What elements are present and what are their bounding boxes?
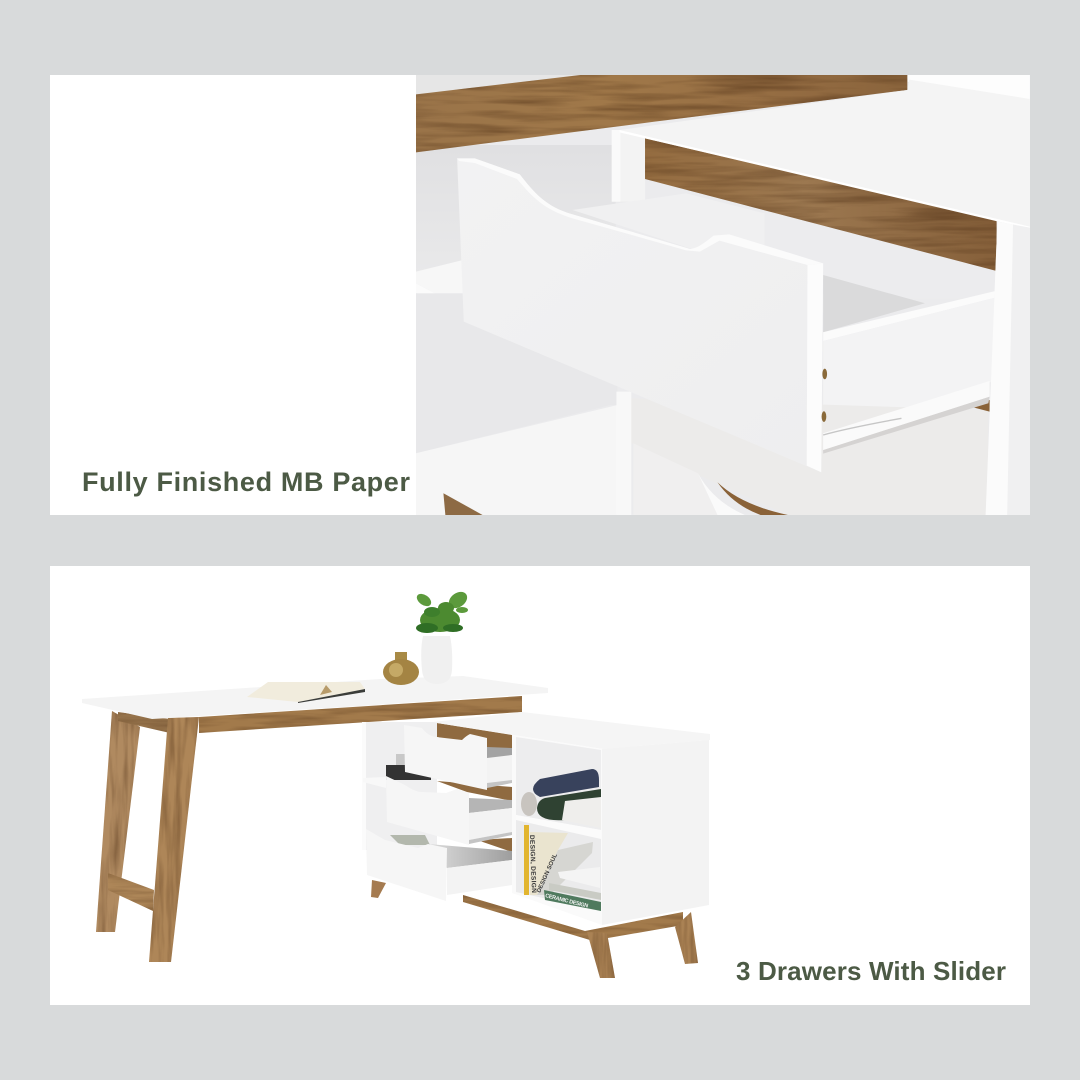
cabinet side panel (602, 740, 709, 925)
drawer screws (822, 369, 827, 422)
white planter (421, 636, 452, 684)
photo: open drawer close-up (416, 75, 1030, 515)
panel: three drawers with slider (50, 566, 1030, 1005)
shelf books (524, 825, 601, 911)
panel: fully finished MB paper (50, 75, 1030, 515)
cabinet top (433, 712, 710, 749)
plant leaves (415, 589, 470, 633)
desk apron (199, 696, 522, 733)
bottom drawer (366, 829, 512, 901)
open book (247, 682, 365, 703)
panel background (50, 566, 1030, 1005)
desk top (82, 676, 548, 719)
desk inner apron (118, 712, 170, 733)
shelf books: DESIGN, DESIGN (528, 835, 537, 893)
wood behind drawers (437, 723, 512, 852)
desk back leg (96, 711, 140, 932)
caption: Fully Finished MB Paper: Fully Finished MB Paper (82, 467, 410, 497)
cabinet base and legs (371, 880, 698, 978)
caption: 3 Drawers With Slider: 3 Drawers With Slider (736, 956, 1006, 986)
desk illustration (82, 589, 710, 978)
cabinet left section (362, 722, 437, 850)
top drawer (404, 725, 512, 790)
middle drawer (386, 776, 512, 845)
shelf books: DESIGN SOUL (536, 853, 559, 894)
desk front leg (149, 717, 199, 962)
panel background (50, 75, 1030, 515)
shelf books: CERAMIC DESIGN (545, 893, 589, 910)
folded towels (521, 769, 601, 828)
cabinet open shelving (512, 735, 602, 925)
gold vase (383, 652, 419, 685)
desk brace (108, 873, 154, 911)
